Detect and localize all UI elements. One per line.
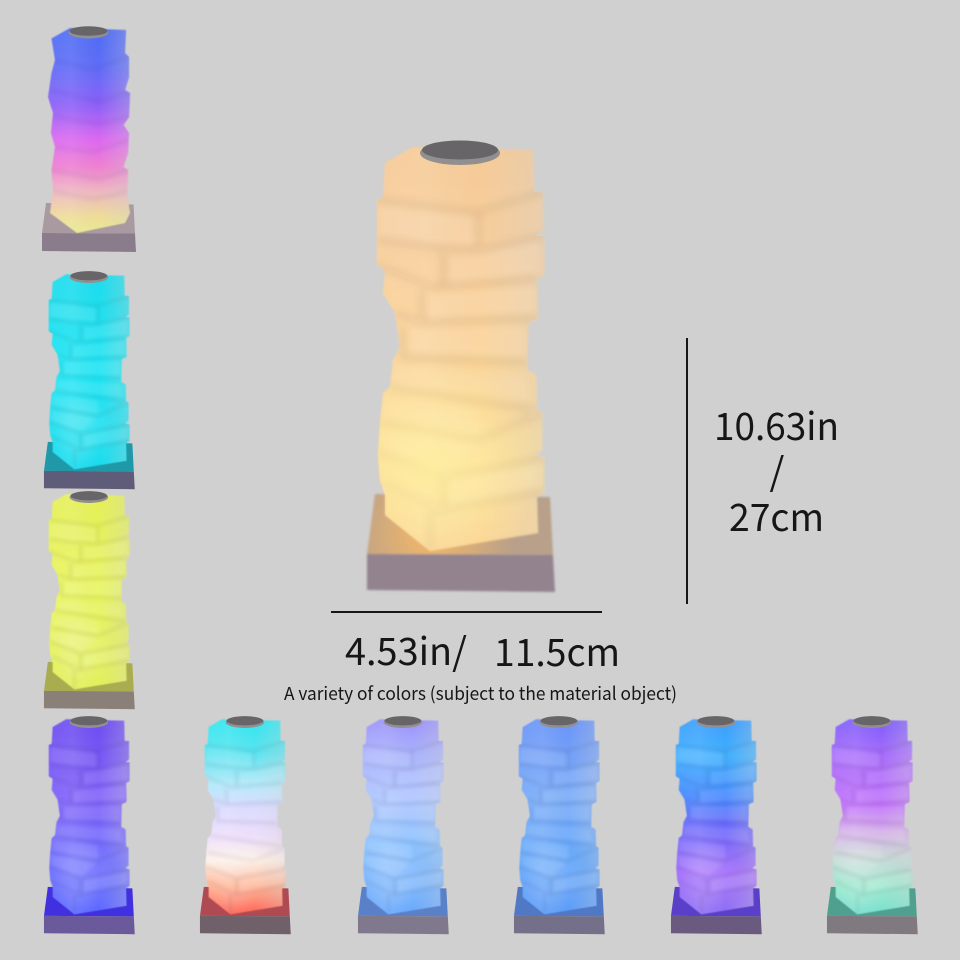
height dimension label: / <box>770 441 785 496</box>
lamp: periwinkle to light blue <box>358 716 449 934</box>
lamp: cyan to red gradient <box>200 716 291 934</box>
lamp: sky blue <box>514 716 605 934</box>
lamp base <box>367 494 555 592</box>
lamp body: twisted stacked blocks <box>370 140 550 560</box>
height dimension label <box>714 396 839 542</box>
lamp: yellow-green <box>44 491 135 709</box>
lamp top touch cap <box>420 140 500 165</box>
lamp: violet <box>44 716 135 934</box>
height dimension label: 10.63in <box>714 396 839 451</box>
width dimension label: 11.5cm <box>494 622 620 677</box>
lamp: blue to yellow gradient <box>42 26 136 252</box>
lamp: cyan <box>44 271 135 489</box>
width dimension label: 4.53in/ <box>345 621 467 676</box>
caption: A variety of colors (subject to the material object) <box>284 680 677 706</box>
width dimension label <box>345 621 620 677</box>
main lamp: warm amber <box>367 140 555 592</box>
lamp: purple to mint gradient <box>827 716 918 934</box>
width dimension line <box>331 611 602 613</box>
height dimension label: 27cm <box>729 487 824 542</box>
lamp: blue to purple gradient <box>671 716 762 934</box>
height dimension line <box>686 338 688 604</box>
